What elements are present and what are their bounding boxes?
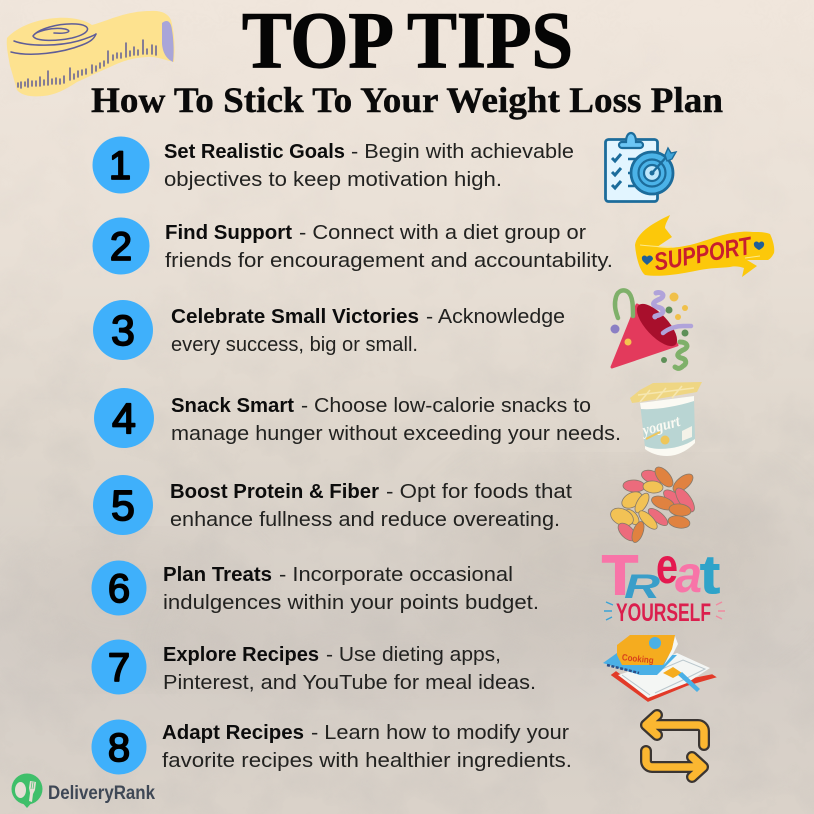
number badge 6: 6 <box>108 567 130 611</box>
tip 7 <box>92 635 715 701</box>
tip 8 text: favorite recipes with healthier ingredients. <box>162 749 572 772</box>
number badge 2: 2 <box>110 225 132 269</box>
tip 6 text: indulgences within your points budget. <box>163 591 539 614</box>
icon: treat yourself lettering: a <box>675 546 702 604</box>
tip 3 text: - Acknowledge <box>426 305 565 328</box>
icon: stack of recipe books <box>603 635 715 701</box>
number badge 5 <box>93 475 153 535</box>
icon: support banner <box>635 215 774 277</box>
number badge 6 <box>92 560 146 616</box>
number badge 7 <box>92 640 146 694</box>
tip 6 text: Plan Treats <box>163 563 272 586</box>
tip 7 text: Pinterest, and YouTube for meal ideas. <box>163 671 536 694</box>
tip 8 text: Adapt Recipes <box>162 721 304 744</box>
tip 6 text <box>163 563 539 614</box>
icon: beans pile <box>608 464 698 544</box>
number badge 8: 8 <box>108 726 130 770</box>
tip 4 text: - Choose low-calorie snacks to <box>301 394 591 417</box>
tip 5 <box>93 464 698 544</box>
icon: clipboard with target <box>606 133 676 202</box>
tip 8 text: - Learn how to modify your <box>311 721 569 744</box>
icon: support banner: SUPPORT <box>652 232 755 277</box>
tip 4 text: Snack Smart <box>171 394 294 417</box>
tip 2 text: - Connect with a diet group or <box>299 221 586 244</box>
tip 4 <box>94 382 702 456</box>
icon: treat yourself lettering: e <box>656 538 678 594</box>
number badge 5: 5 <box>111 482 135 530</box>
number badge 3 <box>93 300 153 360</box>
tip 1 <box>92 133 676 202</box>
tip 8 <box>92 715 704 777</box>
tip 2 text: friends for encouragement and accountability. <box>165 249 613 272</box>
tip 5 text <box>170 480 572 531</box>
tip 5 text: Boost Protein & Fiber <box>170 480 379 503</box>
tip 4 text <box>171 394 621 445</box>
number badge 1: 1 <box>109 144 131 188</box>
tip 1 text <box>164 140 574 191</box>
icon: treat yourself lettering: YOURSELF <box>616 599 711 627</box>
number badge 3: 3 <box>111 307 135 355</box>
icon: green spoon and fork <box>12 774 42 808</box>
tip 7 text <box>163 643 536 694</box>
icon: stack of recipe books: Cooking <box>621 652 654 665</box>
tip 3 text: Celebrate Small Victories <box>171 305 419 328</box>
tip 1 text: objectives to keep motivation high. <box>164 168 502 191</box>
number badge 4 <box>94 388 154 448</box>
icon: treat yourself lettering: R <box>624 568 661 606</box>
tip 2 text: Find Support <box>165 221 292 244</box>
icon: treat yourself lettering <box>602 538 725 627</box>
icon: party popper <box>610 290 691 368</box>
tip 3 text: every success, big or small. <box>171 333 418 356</box>
tip 1 text: Set Realistic Goals <box>164 140 345 163</box>
tip 3 <box>93 290 691 368</box>
tip 2 text <box>165 221 613 272</box>
icon: treat yourself lettering: t <box>700 545 720 605</box>
number badge 4: 4 <box>112 395 136 443</box>
number badge 1 <box>92 136 150 194</box>
tip 7 text: - Use dieting apps, <box>326 643 501 666</box>
icon: yogurt cup: yogurt <box>639 413 682 440</box>
number badge 8 <box>92 720 146 774</box>
tip 1 text: - Begin with achievable <box>351 140 574 163</box>
logo: DeliveryRank: DeliveryRank <box>48 782 155 804</box>
icon: yogurt cup <box>630 382 702 456</box>
tip 4 text: manage hunger without exceeding your needs. <box>171 422 621 445</box>
tip 6 <box>92 538 725 627</box>
tip 7 text: Explore Recipes <box>163 643 319 666</box>
tip 2 <box>92 215 774 277</box>
tip 6 text: - Incorporate occasional <box>279 563 513 586</box>
tip 5 text: enhance fullness and reduce overeating. <box>170 508 560 531</box>
tip 5 text: - Opt for foods that <box>386 480 572 503</box>
icon: measuring tape <box>7 11 175 96</box>
icon: treat yourself lettering: T <box>602 543 638 606</box>
subtitle: How To Stick To Your Weight Loss Plan <box>91 80 723 120</box>
number badge 2 <box>92 218 150 274</box>
icon: swap arrows <box>646 715 704 777</box>
logo: DeliveryRank <box>12 774 155 808</box>
tip 8 text <box>162 721 572 772</box>
tip 3 text <box>171 305 565 356</box>
number badge 7: 7 <box>108 646 130 690</box>
